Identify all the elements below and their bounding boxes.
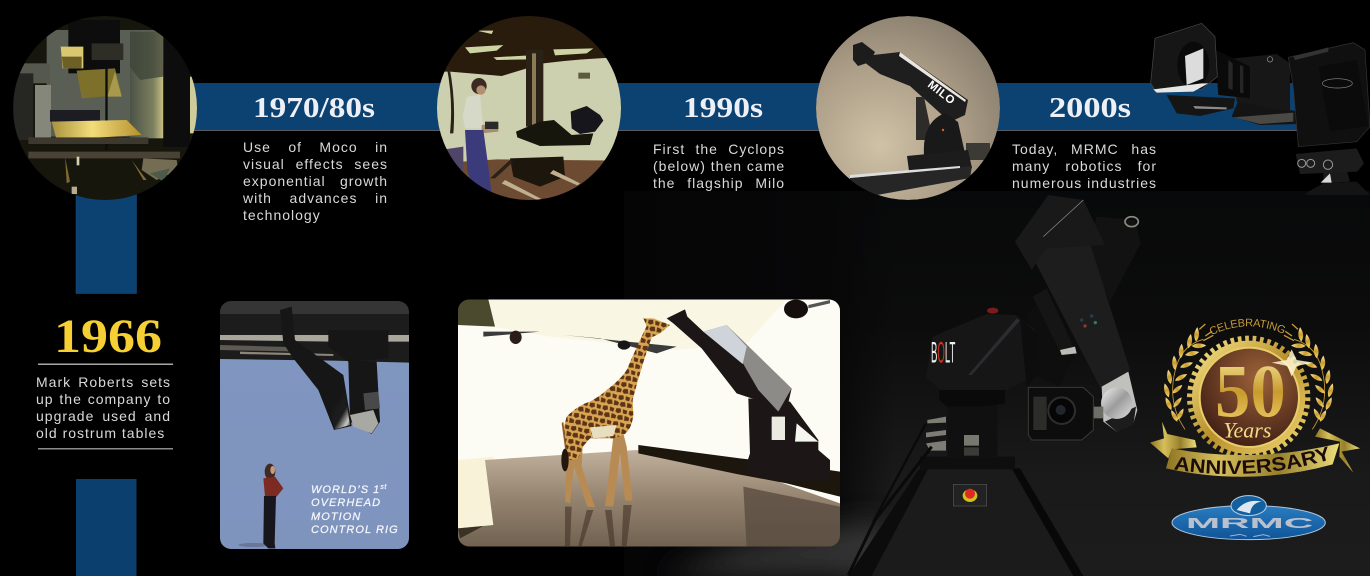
text block: 2000s [1012, 141, 1157, 191]
vertical connector: bottom [76, 479, 136, 576]
year heading: 1966: 1966 [54, 310, 162, 363]
text block: 1970/80s: technology [243, 207, 321, 223]
text block: 1966: old rostrum tables [36, 425, 165, 441]
caption: overhead rig [311, 484, 399, 536]
photo: giraffe with Cyclops rig [457, 298, 842, 548]
rule below founding text [38, 448, 173, 450]
BOLT logo: BOLT [931, 337, 955, 370]
text block: 1970/80s: with advances in [243, 190, 388, 206]
year heading: 2000s: 2000s [1049, 93, 1131, 124]
text block: 1970/80s: Use of Moco in [243, 139, 388, 155]
timeline band [185, 83, 1297, 131]
emergency stop button [963, 489, 977, 502]
vertical connector: top [76, 190, 136, 294]
text block: 1970/80s: visual effects sees [243, 156, 388, 172]
photo circle: rostrum table [10, 13, 200, 203]
laurel right [1284, 324, 1335, 429]
year heading: 1970/80s: 1970/80s [253, 93, 375, 124]
photo circle: Milo rig on beige [816, 16, 1000, 200]
celebrating: CELEBRATING [1210, 318, 1285, 334]
year heading: 1990s: 1990s [683, 93, 763, 124]
panel: dark robot background [624, 191, 1370, 576]
photo: overhead motion control rig [220, 301, 410, 549]
logo: MRMC: MRMC [1186, 516, 1314, 532]
caption: overhead rig: CONTROL RIG [311, 524, 399, 536]
robot: BOLT arm [848, 195, 1141, 576]
text block: 1966: up the company to [36, 391, 171, 407]
text block: 1970/80s: exponential growth [243, 173, 388, 189]
text block: 1966: upgrade used and [36, 408, 171, 424]
rule above founding text [38, 364, 173, 365]
text block: 1966: Mark Roberts sets [36, 374, 171, 390]
caption: overhead rig: OVERHEAD [311, 497, 381, 509]
text block: 2000s: many robotics for [1012, 158, 1157, 174]
photo circle: man with motion control rig [437, 13, 623, 203]
logo: MRMC [1172, 496, 1325, 540]
camera on timeline end [1151, 23, 1370, 195]
anniversary ribbon text: ANNIVERSARY [1174, 446, 1328, 474]
number 50: 50 [1215, 351, 1286, 434]
text block: 2000s: Today, MRMC has [1012, 141, 1157, 157]
text block: 1990s: the flagship Milo [653, 175, 785, 191]
text block: 1970/80s [243, 139, 388, 223]
text block: 1990s: First the Cyclops [653, 141, 785, 157]
years script: Years [1223, 417, 1271, 442]
giraffe [561, 318, 670, 507]
text block: 2000s: numerous industries [1012, 175, 1157, 191]
caption: overhead rig: WORLD’S 1st [311, 484, 387, 496]
caption: overhead rig: MOTION [311, 511, 361, 523]
text block: 1990s: (below) then came [653, 158, 785, 174]
text block: 1966 [36, 374, 171, 441]
milo label: MILO [925, 79, 957, 108]
badge: 50 years anniversary [1150, 318, 1360, 513]
laurel left [1162, 324, 1213, 429]
text block: 1990s [653, 141, 785, 191]
